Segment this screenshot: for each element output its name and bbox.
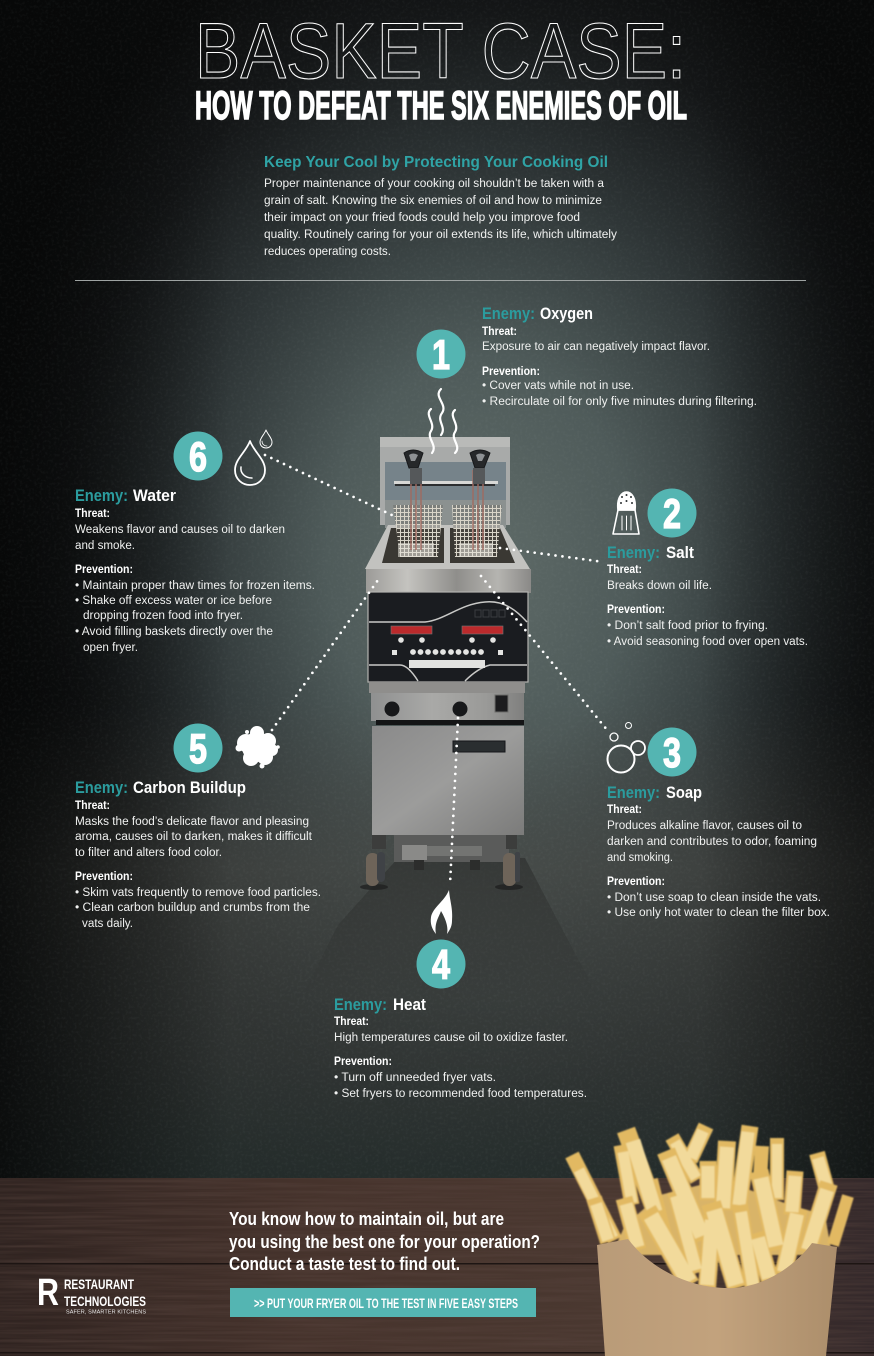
- dotted connector: water: [265, 455, 396, 517]
- icon: bubbles: [608, 722, 645, 772]
- fries in carton: [572, 1126, 848, 1356]
- number badge 3: 3: [663, 729, 681, 776]
- intro text block: quality. Routinely caring for your oil extends its life, which ultimately: [264, 229, 617, 241]
- number badge 4: [416, 940, 466, 988]
- number badge 2: [648, 488, 696, 538]
- text: oxygen: Prevention:: [482, 364, 540, 378]
- text: soap: Soap: [666, 783, 702, 802]
- text: carbon buildup: Prevention:: [75, 869, 133, 883]
- text: water: • Avoid filling baskets directly over the: [75, 626, 273, 638]
- icon: carbon splat: [236, 726, 280, 768]
- text: salt: Enemy:: [607, 543, 660, 562]
- enemy 1: oxygen: [416, 304, 757, 453]
- text: soap: Prevention:: [607, 874, 665, 888]
- enemy 4: heat: [334, 890, 587, 1100]
- text: water: • Shake off excess water or ice before: [75, 595, 272, 607]
- number badge 5: [174, 724, 222, 772]
- text: soap: • Don’t use soap to clean inside the vats.: [607, 892, 821, 904]
- dotted connector: soap: [481, 576, 608, 731]
- fryer door: [372, 726, 524, 835]
- text: carbon buildup: Enemy:: [75, 778, 128, 797]
- enemy 5: carbon buildup: [75, 724, 321, 930]
- text: water: open fryer.: [83, 642, 138, 654]
- text: carbon buildup: • Skim vats frequently to remove food particles.: [75, 887, 321, 899]
- logo: Restaurant Technologies: RESTAURANT: [64, 1276, 134, 1292]
- carton: [597, 1239, 837, 1356]
- fryer base and casters: [360, 835, 523, 890]
- text: water: and smoke.: [75, 540, 135, 552]
- text: carbon buildup: to filter and alters food color.: [75, 847, 222, 859]
- text: carbon buildup: [75, 778, 321, 930]
- text: water: Weakens flavor and causes oil to darken: [75, 524, 285, 536]
- fryer illustration: [360, 437, 531, 890]
- number badge 4: 4: [432, 941, 450, 988]
- title: BASKET CASE:: [195, 6, 686, 95]
- text: oxygen: • Cover vats while not in use.: [482, 380, 634, 392]
- number badge 5: 5: [189, 725, 207, 772]
- fryer backsplash: [380, 437, 510, 528]
- icon: steam: [429, 389, 457, 453]
- text: salt: • Avoid seasoning food over open vats.: [607, 636, 808, 648]
- fries: [572, 1126, 848, 1288]
- number badge 1: 1: [432, 331, 450, 378]
- enemy 2: salt: [607, 488, 808, 648]
- intro text block: their impact on your fried foods could help you improve food: [264, 212, 580, 224]
- footer call to action text: [229, 1209, 540, 1274]
- intro text block: grain of salt. Knowing the six enemies of oil and how to minimize: [264, 195, 602, 207]
- number badge 3: [648, 728, 696, 776]
- text: heat: [334, 995, 587, 1100]
- text: carbon buildup: • Clean carbon buildup and crumbs from the: [75, 902, 310, 914]
- text: water: [75, 486, 315, 654]
- text: heat: • Turn off unneeded fryer vats.: [334, 1072, 496, 1084]
- logo: Restaurant Technologies: SAFER, SMARTER KITCHENS: [66, 1310, 146, 1316]
- fryer front band: [366, 569, 531, 593]
- text: carbon buildup: Masks the food’s delicate flavor and pleasing: [75, 816, 309, 828]
- text: water: dropping frozen food into fryer.: [83, 610, 243, 622]
- intro text block: [264, 154, 617, 258]
- enemy 6: water: [75, 430, 315, 654]
- dotted connector: heat: [450, 718, 458, 885]
- text: soap: Produces alkaline flavor, causes oil to: [607, 820, 802, 832]
- text: oxygen: [482, 304, 757, 408]
- text: soap: and smoking.: [607, 852, 673, 864]
- text: salt: Salt: [666, 543, 694, 562]
- text: heat: • Set fryers to recommended food temperatures.: [334, 1088, 587, 1100]
- text: salt: • Don’t salt food prior to frying.: [607, 620, 768, 632]
- icon: salt shaker: [613, 492, 639, 534]
- icon: flame: [431, 890, 452, 934]
- dotted connector: carbon: [272, 580, 378, 730]
- number badge 2: 2: [663, 490, 681, 537]
- text: carbon buildup: Threat:: [75, 798, 110, 812]
- logo: Restaurant Technologies: R: [37, 1272, 59, 1314]
- number badge 1: [416, 330, 466, 378]
- text: heat: Prevention:: [334, 1054, 392, 1068]
- footer button: >> PUT YOUR FRYER OIL TO THE TEST IN FIVE EASY STEPS: [254, 1295, 518, 1311]
- text: oxygen: Exposure to air can negatively impact flavor.: [482, 341, 710, 353]
- text: heat: Threat:: [334, 1014, 369, 1028]
- fryer vats: [365, 525, 530, 569]
- text: oxygen: • Recirculate oil for only five minutes during filtering.: [482, 396, 757, 408]
- text: heat: Heat: [393, 995, 426, 1014]
- footer call to action text: Conduct a taste test to find out.: [229, 1254, 460, 1274]
- text: oxygen: Threat:: [482, 324, 517, 338]
- text: heat: Enemy:: [334, 995, 387, 1014]
- text: soap: darken and contributes to odor, foaming: [607, 836, 817, 848]
- footer call to action text: You know how to maintain oil, but are: [229, 1209, 504, 1229]
- text: salt: Breaks down oil life.: [607, 580, 712, 592]
- wood table footer: [0, 1178, 874, 1356]
- text: carbon buildup: Carbon Buildup: [133, 778, 246, 797]
- text: carbon buildup: aroma, causes oil to darken, makes it difficult: [75, 831, 313, 843]
- text: oxygen: Oxygen: [540, 304, 593, 323]
- text: soap: Enemy:: [607, 783, 660, 802]
- text: soap: [607, 783, 830, 919]
- text: salt: Threat:: [607, 562, 642, 576]
- text: soap: Threat:: [607, 802, 642, 816]
- fryer control panel: [368, 592, 528, 682]
- number badge 6: 6: [189, 433, 207, 480]
- logo: Restaurant Technologies: TECHNOLOGIES: [64, 1293, 146, 1309]
- enemy 3: soap: [607, 722, 830, 919]
- text: water: Prevention:: [75, 562, 133, 576]
- text: heat: High temperatures cause oil to oxidize faster.: [334, 1032, 568, 1044]
- number badge 6: [174, 432, 222, 480]
- fryer baskets: [393, 450, 502, 557]
- text: oxygen: Enemy:: [482, 304, 535, 323]
- text: carbon buildup: vats daily.: [82, 918, 133, 930]
- footer call to action text: you using the best one for your operation?: [229, 1232, 540, 1252]
- text: water: Threat:: [75, 506, 110, 520]
- text: salt: [607, 543, 808, 648]
- footer button: [230, 1288, 536, 1317]
- text: salt: Prevention:: [607, 602, 665, 616]
- intro text block: Proper maintenance of your cooking oil shouldn’t be taken with a: [264, 178, 605, 190]
- intro text block: reduces operating costs.: [264, 246, 391, 258]
- text: soap: • Use only hot water to clean the filter box.: [607, 907, 830, 919]
- text: water: Water: [133, 486, 176, 505]
- floor shadow under fryer: [300, 858, 600, 1000]
- icon: water drops: [235, 430, 272, 485]
- intro text block: Keep Your Cool by Protecting Your Cooking Oil: [264, 154, 608, 171]
- text: water: • Maintain proper thaw times for frozen items.: [75, 580, 315, 592]
- text: water: Enemy:: [75, 486, 128, 505]
- dotted connector: salt: [500, 548, 604, 562]
- fryer lower controls: [369, 682, 525, 725]
- logo: Restaurant Technologies: [37, 1272, 146, 1316]
